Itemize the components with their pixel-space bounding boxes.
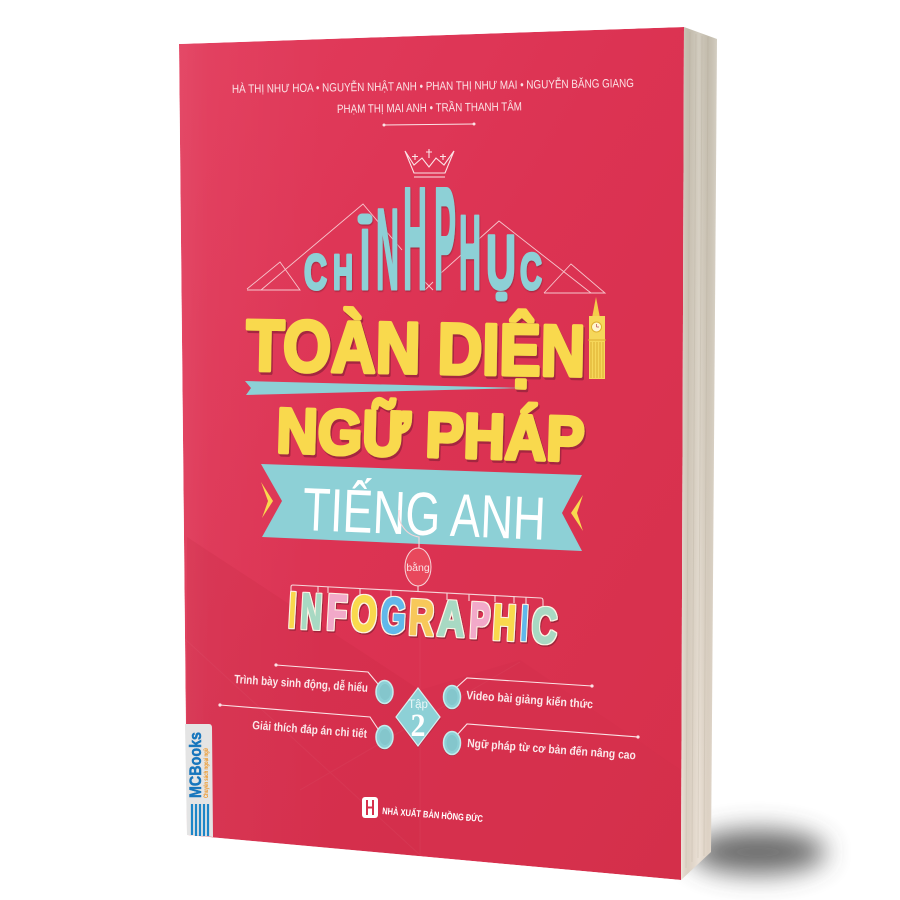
feature: Trình bày sinh động, dễ hiểu: Trình bày sinh động, dễ hiểu bbox=[234, 671, 369, 695]
decorative ribbon bbox=[245, 381, 522, 395]
spine logo: MCBooks bbox=[185, 724, 213, 837]
heading: CHINH PHỤC: U bbox=[486, 220, 516, 306]
heading: CHINH PHỤC: H bbox=[333, 246, 353, 300]
bằng badge: bằng bbox=[406, 561, 430, 574]
front cover bbox=[179, 27, 684, 880]
publisher logo: NHÀ XUẤT BẢN HỒNG ĐỨC bbox=[382, 805, 484, 825]
authors: PHẠM THỊ MAI ANH • TRẦN THANH TÂM bbox=[337, 98, 522, 116]
icon: crown bbox=[405, 149, 454, 177]
heading: NGỮ PHÁP: NGỮ PHÁP bbox=[276, 395, 586, 475]
badge: Tập 2: Tập bbox=[408, 699, 428, 711]
heading: TOÀN DIỆN: TOÀN DIỆN bbox=[246, 305, 586, 392]
floor shadow bbox=[690, 830, 826, 874]
badge: Tập 2: 2 bbox=[410, 708, 426, 744]
heading: CHINH PHỤC: H bbox=[403, 157, 427, 320]
INFOGRAPHIC wordmark: I bbox=[287, 582, 298, 638]
INFOGRAPHIC wordmark: I bbox=[519, 595, 530, 651]
heading: CHINH PHỤC: C bbox=[304, 246, 327, 300]
INFOGRAPHIC wordmark: O bbox=[349, 585, 378, 642]
page block bbox=[681, 27, 717, 880]
INFOGRAPHIC wordmark: C bbox=[530, 597, 558, 654]
feature: Video bài giảng kiến thức bbox=[443, 678, 594, 711]
spine logo: MCBooks: MCBooks bbox=[186, 732, 205, 798]
banner text: TIẾNG ANH: TIẾNG ANH bbox=[301, 475, 547, 553]
INFOGRAPHIC wordmark: A bbox=[436, 590, 466, 647]
INFOGRAPHIC wordmark bbox=[287, 582, 558, 654]
INFOGRAPHIC wordmark: R bbox=[407, 589, 435, 646]
feature: Trình bày sinh động, dễ hiểu bbox=[234, 663, 394, 705]
feature: Giải thích đáp án chi tiết: Giải thích đáp án chi tiết bbox=[252, 718, 368, 741]
book mockup bbox=[179, 27, 840, 894]
roof triangles bbox=[247, 204, 605, 293]
banner bbox=[261, 464, 582, 551]
heading: CHINH PHỤC: H bbox=[459, 194, 481, 312]
INFOGRAPHIC wordmark: N bbox=[299, 583, 323, 640]
feature: Ngữ pháp từ cơ bản đến nâng cao: Ngữ pháp từ cơ bản đến nâng cao bbox=[467, 736, 636, 762]
spine logo: MCBooks: Chuyên sách ngoại ngữ bbox=[203, 748, 210, 798]
INFOGRAPHIC wordmark: F bbox=[325, 584, 348, 641]
feature: Ngữ pháp từ cơ bản đến nâng cao bbox=[443, 724, 640, 762]
authors bbox=[232, 75, 634, 126]
publisher logo bbox=[362, 797, 484, 825]
heading: CHINH PHỤC: N bbox=[376, 186, 399, 314]
heading: CHINH PHỤC: P bbox=[434, 157, 456, 320]
badge: Tập 2 bbox=[396, 688, 441, 748]
chevrons bbox=[261, 482, 583, 531]
INFOGRAPHIC wordmark: H bbox=[491, 594, 517, 651]
bằng badge bbox=[405, 548, 431, 586]
heading: CHINH PHỤC: C bbox=[520, 243, 542, 300]
feature: Video bài giảng kiến thức: Video bài giảng kiến thức bbox=[466, 688, 594, 711]
feature: Giải thích đáp án chi tiết bbox=[218, 703, 394, 750]
heading: CHINH PHỤC bbox=[304, 157, 542, 320]
connector tree bbox=[291, 510, 543, 606]
authors: HÀ THỊ NHƯ HOA • NGUYỄN NHẬT ANH • PHAN THỊ NHƯ MAI • NGUYỄN BĂNG GIANG bbox=[232, 75, 634, 96]
icon: Big Ben tower bbox=[588, 297, 606, 379]
heading: CHINH PHỤC: I bbox=[360, 213, 370, 308]
INFOGRAPHIC wordmark: P bbox=[468, 592, 491, 649]
INFOGRAPHIC wordmark: G bbox=[379, 587, 407, 644]
